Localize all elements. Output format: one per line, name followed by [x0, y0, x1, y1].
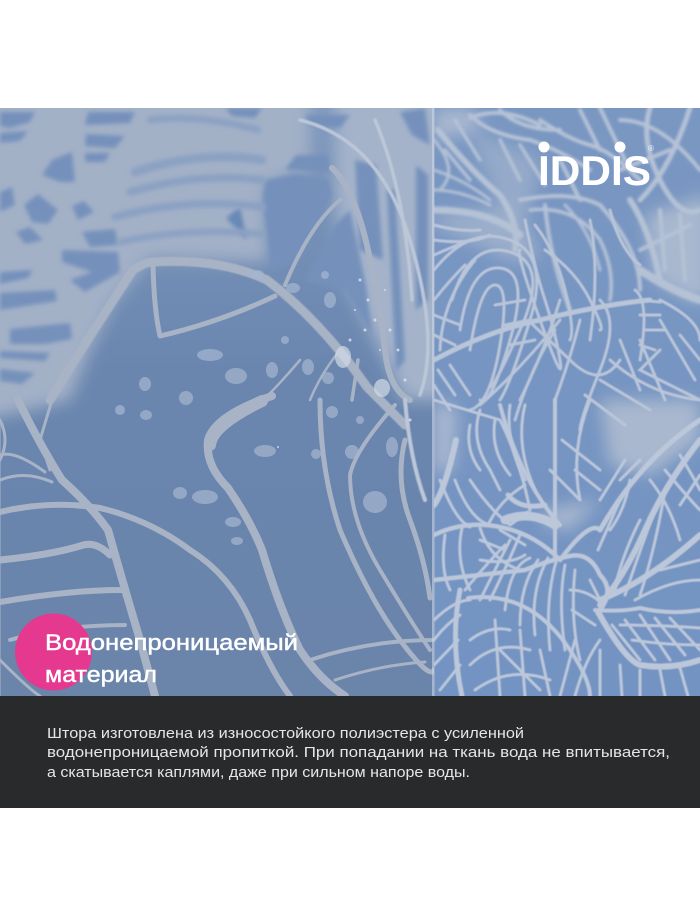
concentric middle leaf lines: [434, 210, 700, 430]
ribs: right diagonal leaf: [598, 455, 700, 600]
heading: Водонепроницаемый материал: материал: [45, 662, 157, 687]
droplets: [115, 270, 398, 545]
dark description band: [0, 696, 700, 808]
photo: left fabric panel with droplets: [0, 90, 450, 696]
photo: right fabric panel: [434, 108, 700, 696]
description text: Штора изготовлена из износостойкого полиэстера с усиленной: [47, 725, 524, 742]
glitter of tiny droplets: [277, 278, 412, 448]
pink accent circle: [15, 614, 92, 690]
ribs: bottom left leaves: [434, 600, 470, 690]
infographic page: [0, 108, 700, 808]
logo: IDDIS: ®: [648, 144, 654, 153]
mid-tone stripes of the central leaf: [115, 118, 262, 242]
bright fold between panels: [432, 108, 434, 696]
description text: водонепроницаемой пропиткой. При попадании на ткань вода не впитывается,: [47, 744, 670, 761]
heading: Водонепроницаемый материал: Водонепроницаемый: [45, 630, 298, 655]
description text: [47, 725, 670, 781]
fine ribs at the right of the left panel: [300, 120, 428, 500]
lighter washed areas: [434, 108, 700, 530]
lower leaf veins: [434, 400, 700, 696]
dark patches of upper-left leaves: [0, 108, 430, 384]
upper blurred veins: [434, 108, 700, 310]
light upper fabric area: [0, 90, 450, 420]
ribs of upper-mid lower leaves: [469, 405, 535, 490]
lower veins: [0, 505, 290, 696]
large light veins: [0, 168, 434, 696]
ribs: big striped centre leaf: [465, 535, 600, 660]
central S vein: [208, 396, 345, 696]
heading: Водонепроницаемый материал: [45, 630, 298, 687]
logo: IDDIS: IDDIS: [538, 147, 651, 194]
description text: а скатывается каплями, даже при сильном напоре воды.: [47, 764, 470, 781]
